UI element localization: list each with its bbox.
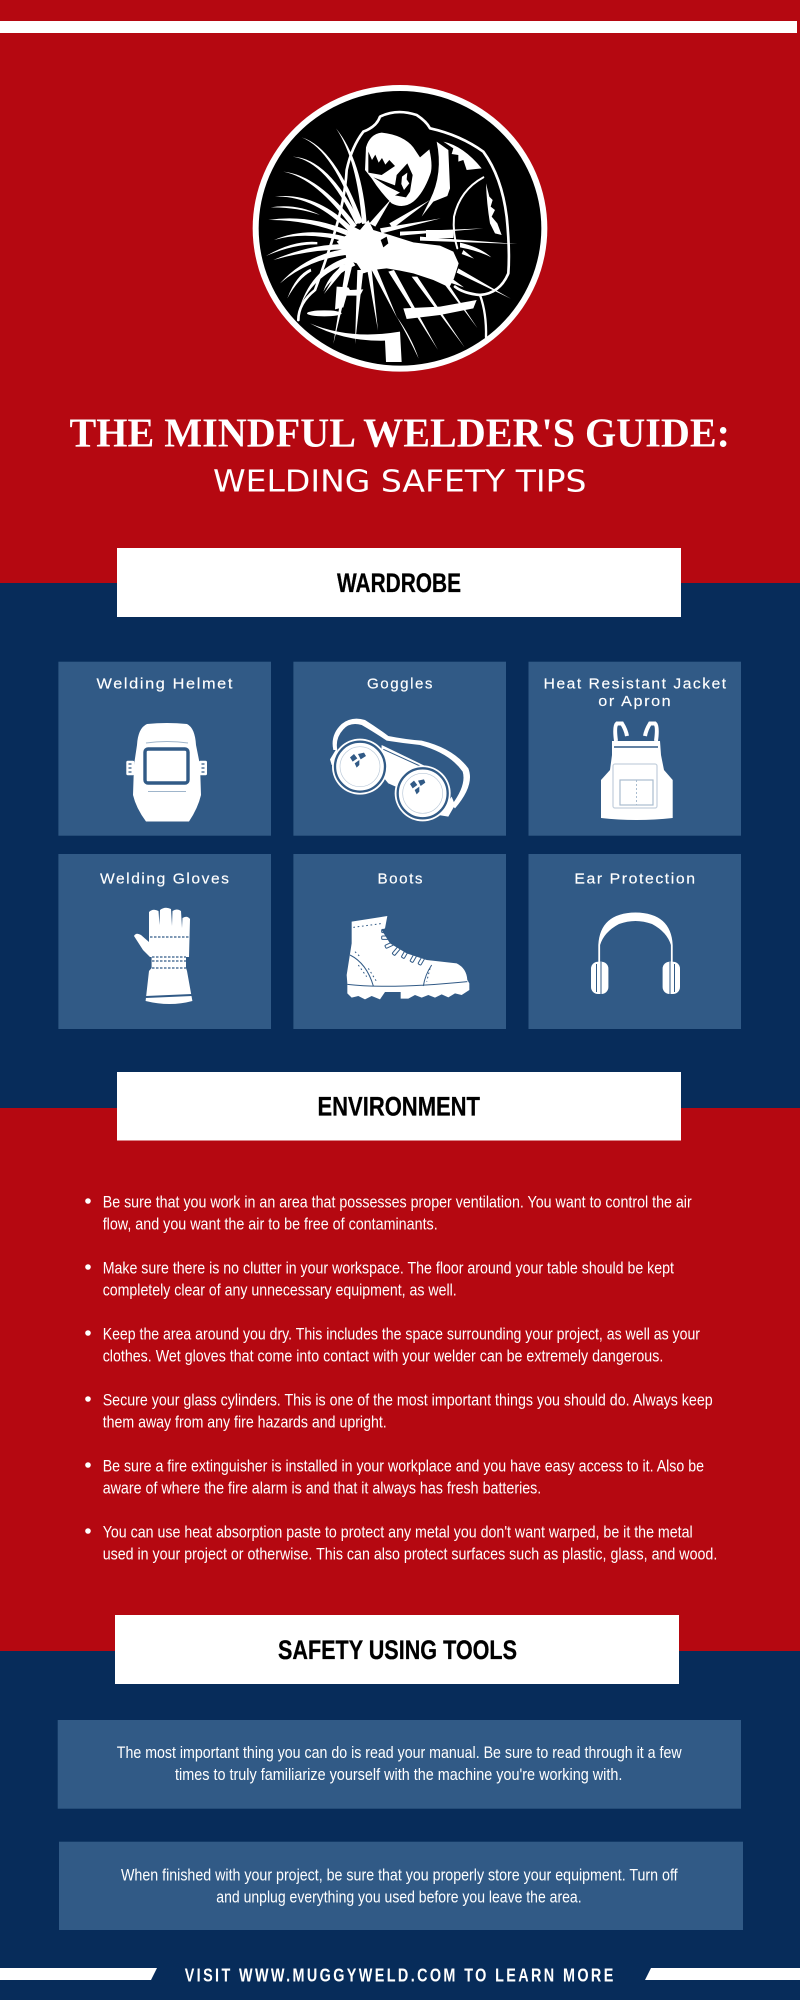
heading: safety using tools — [115, 1615, 679, 1684]
tip: clutter: completely clear of any unnecessary equipment, as well. — [103, 1281, 457, 1299]
card: boots — [293, 854, 506, 1029]
tip: heat absorption paste — [85, 1523, 717, 1563]
table and clamps — [403, 300, 477, 319]
card: heat resistant jacket or apron: Heat Resistant Jacket — [544, 675, 728, 692]
tip: fire extinguisher: aware of where the fire alarm is and that it always has fresh batteries. — [103, 1479, 541, 1497]
icon: apron — [601, 724, 673, 820]
heading: environment: ENVIRONMENT — [318, 1092, 480, 1122]
tip: glass cylinders — [85, 1391, 713, 1431]
icon: welder emblem — [253, 85, 547, 372]
card: welding helmet — [58, 662, 271, 836]
footer bar right — [645, 1968, 800, 1980]
subtitle: WELDING SAFETY TIPS — [213, 464, 586, 500]
card: goggles: Goggles — [367, 675, 434, 692]
card: ear protection: Ear Protection — [574, 870, 697, 887]
tip: glass cylinders: Secure your glass cylinders. This is one of the most important things you should do. Always keep — [103, 1391, 713, 1409]
card: welding helmet: Welding Helmet — [96, 675, 234, 692]
spark and arm — [337, 220, 459, 287]
panel: environment red background — [0, 1108, 800, 1651]
heading: wardrobe — [117, 548, 681, 617]
panel: read your manual — [58, 1720, 741, 1809]
tip: keep dry — [85, 1325, 700, 1365]
card: goggles — [293, 662, 506, 836]
footer bar left — [0, 1968, 157, 1980]
tip: ventilation: Be sure that you work in an area that possesses proper ventilation. You want to control the air — [103, 1193, 692, 1211]
tip: glass cylinders: them away from any fire hazards and upright. — [103, 1413, 387, 1431]
panel: read your manual: times to truly familiarize yourself with the machine you're working with. — [175, 1766, 622, 1784]
list: environment tips — [85, 1193, 717, 1563]
icon: welding glove — [134, 908, 192, 1004]
footer call to action: VISIT WWW.MUGGYWELD.COM TO LEARN MORE — [185, 1966, 616, 1986]
tip: heat absorption paste: used in your project or otherwise. This can also protect surfaces such as plastic, glass, and wood. — [103, 1545, 717, 1563]
card: heat resistant jacket or apron: or Apron — [598, 693, 672, 710]
card: ear protection — [528, 854, 741, 1029]
top white bar — [0, 21, 797, 33]
tip: fire extinguisher: Be sure a fire extinguisher is installed in your workplace and you have easy access to it. Also be — [103, 1457, 704, 1475]
icon: boot — [347, 916, 469, 999]
tip: clutter — [85, 1259, 674, 1299]
title: THE MINDFUL WELDER'S GUIDE: — [70, 410, 730, 456]
card: welding gloves: Welding Gloves — [100, 870, 230, 887]
card: heat resistant jacket or apron — [528, 662, 741, 836]
panel: store your equipment — [59, 1842, 743, 1930]
heading: safety using tools: SAFETY USING TOOLS — [278, 1635, 517, 1665]
tip: clutter: Make sure there is no clutter in your workspace. The floor around your table should be kept — [103, 1259, 674, 1277]
card: boots: Boots — [378, 870, 424, 887]
tip: fire extinguisher — [85, 1457, 704, 1497]
heading: environment — [117, 1072, 681, 1140]
mask and collar fills — [365, 133, 432, 206]
icon: welding helmet — [126, 723, 207, 822]
icon: goggles — [330, 719, 470, 821]
icon: ear muffs — [591, 912, 680, 994]
heading: wardrobe: WARDROBE — [337, 568, 461, 598]
tip: ventilation — [85, 1193, 692, 1233]
rays — [266, 128, 517, 359]
panel: read your manual: The most important thing you can do is read your manual. Be sure to read through it a few — [117, 1744, 682, 1762]
tip: heat absorption paste: You can use heat absorption paste to protect any metal you don't want warped, be it the metal — [103, 1523, 693, 1541]
tip: keep dry: clothes. Wet gloves that come into contact with your welder can be extremely dangerous. — [103, 1347, 663, 1365]
card: welding gloves — [58, 854, 271, 1029]
tip: ventilation: flow, and you want the air to be free of contaminants. — [103, 1215, 438, 1233]
panel: store your equipment: and unplug everything you used before you leave the area. — [216, 1888, 582, 1906]
panel: header red background — [0, 0, 800, 583]
panel: store your equipment: When finished with your project, be sure that you properly store your equipment. Turn off — [121, 1866, 678, 1884]
tip: keep dry: Keep the area around you dry. This includes the space surrounding your project, as well as your — [103, 1325, 700, 1343]
